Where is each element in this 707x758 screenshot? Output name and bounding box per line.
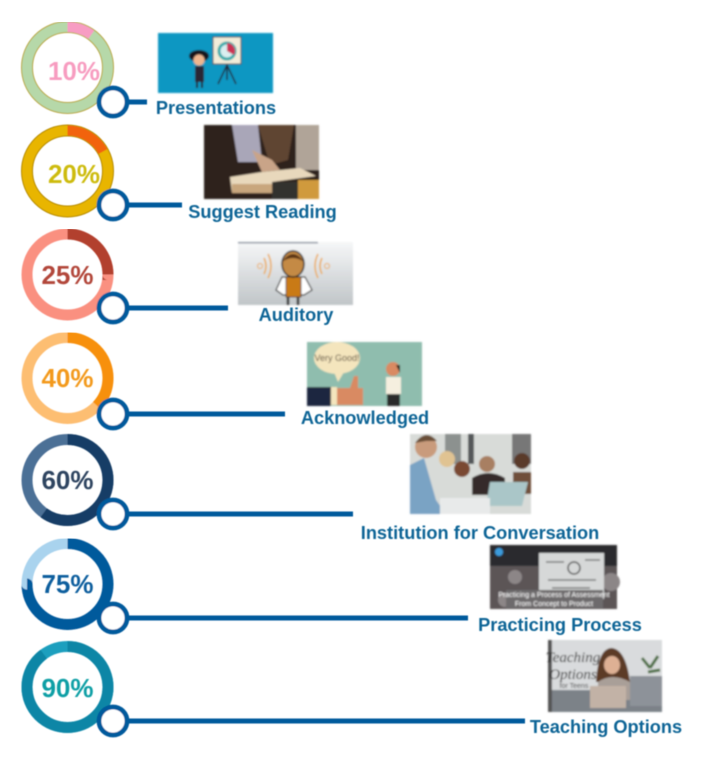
connector: [99, 400, 285, 428]
label: Presentations: [156, 98, 276, 118]
donut: 40%: 40%: [41, 363, 94, 393]
connector: [99, 88, 147, 116]
donut: 25%: 25%: [41, 260, 94, 290]
label: Acknowledged: [301, 408, 429, 428]
donut: 75%: 75%: [41, 569, 94, 599]
label: Auditory: [259, 305, 334, 325]
donut: 90%: [27, 646, 108, 728]
connector: [99, 604, 468, 632]
donut: 90%: 90%: [41, 673, 94, 703]
image: woman at a laptop, Teaching Options: Teaching: [546, 650, 601, 666]
image: woman at a laptop, Teaching Options: for Teens: [560, 683, 589, 690]
donut: 25%: [27, 234, 108, 315]
label: Practicing Process: [478, 615, 642, 635]
donut: 10%: 10%: [48, 56, 100, 86]
image: group conversation around a laptop: [410, 434, 531, 514]
donut: 20%: [27, 130, 108, 212]
item: Acknowledged 40%: [27, 338, 429, 428]
image: presenter at a chart: [158, 33, 273, 93]
donut: 40%: [27, 338, 108, 418]
connector: [99, 707, 525, 735]
item: Auditory 25%: [27, 234, 353, 325]
label: Institution for Conversation: [361, 523, 599, 543]
connector: [99, 191, 182, 219]
item: Teaching Options 90%: [27, 640, 682, 737]
donut: 75%: [27, 544, 108, 624]
item: Suggest Reading 20%: [27, 125, 337, 222]
item: Institution for Conversation 60%: [27, 434, 599, 543]
image: listening character: [238, 242, 353, 305]
connector: [99, 500, 353, 528]
item: Practicing Process 75%: [27, 544, 642, 635]
label: Teaching Options: [530, 717, 682, 737]
image: person reading a book: [204, 125, 319, 199]
label: Suggest Reading: [188, 202, 337, 222]
donut: 20%: 20%: [48, 159, 100, 189]
donut: 60%: 60%: [41, 465, 94, 495]
image: woman at a laptop, Teaching Options: [546, 640, 662, 712]
item: Presentations 10%: [27, 27, 276, 118]
image: thumbs up, Very Good: Very Good!: [314, 353, 360, 363]
image: process sketch on paper: [490, 545, 620, 609]
image: thumbs up, Very Good: [307, 342, 422, 406]
image: process sketch on paper: From Concept to Product: [515, 601, 593, 608]
donut: 10%: [27, 27, 108, 108]
image: process sketch on paper: Practicing a Process of Assessment: [498, 592, 610, 599]
image: woman at a laptop, Teaching Options: Options: [549, 667, 597, 683]
donut: 60%: [27, 440, 108, 520]
connector: [99, 294, 228, 322]
